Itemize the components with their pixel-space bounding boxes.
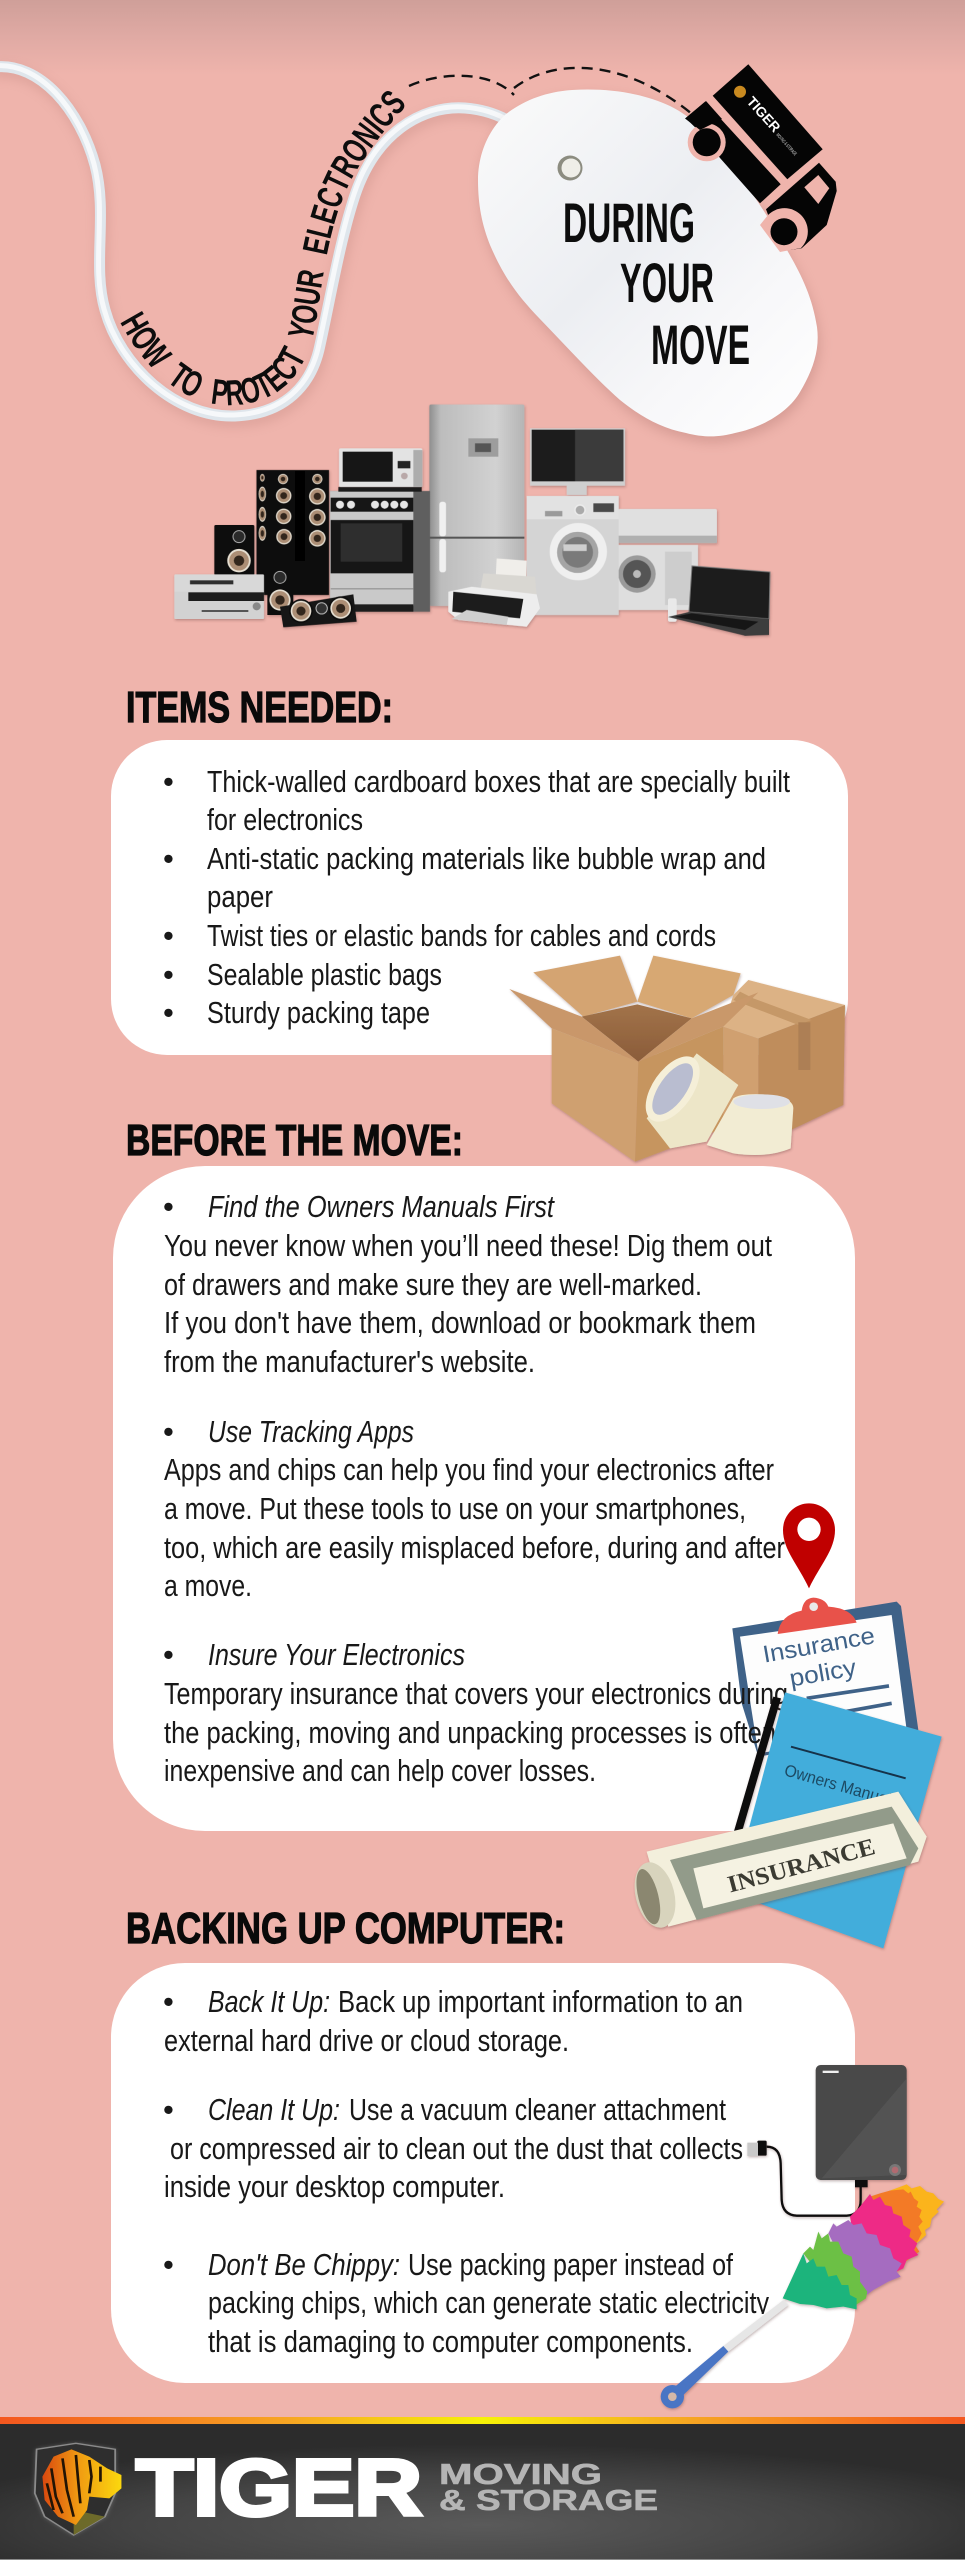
tip: owners manuals: • (163, 1189, 174, 1224)
tip: don't be chippy: Don't Be Chippy: (208, 2247, 400, 2282)
tip: insurance: the packing, moving and unpacking processes is often (164, 1715, 776, 1750)
heading: before the move: BEFORE THE MOVE: (126, 1116, 463, 1165)
items list: • (163, 764, 174, 799)
title: MOVE (651, 313, 750, 376)
text: before the move tips (163, 1189, 788, 1788)
tip: owners manuals: You never know when you’ll need these! Dig them out (164, 1228, 772, 1263)
tip: tracking apps: a move. Put these tools to use on your smartphones, (164, 1491, 746, 1526)
owners manual: Owners Manual (782, 1761, 893, 1809)
tip: back it up: • (163, 1984, 174, 2019)
tip: insurance: • (163, 1637, 174, 1672)
title (563, 191, 750, 376)
insurance certificate scroll (628, 1792, 927, 1932)
tip: back it up (163, 1984, 743, 2058)
tip: owners manuals (163, 1189, 772, 1379)
curved heading: HOW TO PROTECT YOUR ELECTRONICS (120, 91, 404, 406)
tip: back it up: Back up important information to an (338, 1984, 743, 2019)
open box (509, 956, 758, 1162)
footer (0, 2417, 965, 2560)
tip: insurance: Insure Your Electronics (208, 1637, 465, 1672)
tip: clean it up: • (163, 2092, 174, 2127)
icon: moving truck: TIGER (744, 93, 784, 135)
tip: don't be chippy: • (163, 2247, 174, 2282)
tip: don't be chippy: that is damaging to computer components. (208, 2324, 693, 2359)
tip: don't be chippy: packing chips, which can generate static electricity (208, 2285, 769, 2320)
items list: • (163, 841, 174, 876)
tip: tracking apps: Apps and chips can help you find your electronics after (164, 1452, 774, 1487)
items list: Twist ties or elastic bands for cables and cords (207, 918, 716, 953)
tip: tracking apps: • (163, 1414, 174, 1449)
tip: don't be chippy (163, 2247, 775, 2359)
clipboard: insurance policy: Insurance (761, 1622, 877, 1669)
items list: Sturdy packing tape (207, 995, 430, 1030)
bookshelf speaker (214, 525, 254, 575)
moving and storage wordmark (439, 2459, 658, 2517)
illustration: home electronics (174, 404, 770, 636)
tip: back it up: external hard drive or cloud storage. (164, 2023, 569, 2058)
panel: before the move (113, 1166, 855, 1831)
heading: backing up computer: BACKING UP COMPUTER: (126, 1904, 565, 1953)
tip: insurance (163, 1637, 788, 1788)
tip: insurance: inexpensive and can help cover losses. (164, 1753, 596, 1788)
illustration: cardboard boxes and tape (509, 956, 845, 1162)
heading: items needed: ITEMS NEEDED: (126, 683, 393, 732)
tip: insurance: Temporary insurance that covers your electronics during (164, 1676, 788, 1711)
external hard drive (747, 2065, 907, 2216)
tip: clean it up: Clean It Up: (208, 2092, 340, 2127)
tiger logo shield (35, 2443, 121, 2535)
tip: tracking apps: Use Tracking Apps (208, 1414, 414, 1449)
tip: tracking apps (163, 1414, 785, 1603)
items list: Sealable plastic bags (207, 957, 442, 992)
tip: don't be chippy: Use packing paper instead of (408, 2247, 733, 2282)
tip: owners manuals: from the manufacturer's website. (164, 1344, 535, 1379)
tower speakers (257, 470, 329, 595)
stove (330, 491, 430, 612)
icon: moving truck (685, 64, 837, 252)
clipboard: insurance policy: policy (787, 1654, 858, 1693)
icon: moving truck: MOVING & STORAGE (775, 132, 798, 157)
tip: clean it up: Use a vacuum cleaner attachment (349, 2092, 726, 2127)
items list: paper (207, 879, 273, 914)
items list: Anti-static packing materials like bubble wrap and (207, 841, 766, 876)
items list (163, 764, 790, 1030)
illustration: pin, owners manual, certificate (628, 1503, 942, 1948)
tip: clean it up: inside your desktop computer. (164, 2169, 505, 2204)
items list: • (163, 918, 174, 953)
tip: owners manuals: If you don't have them, download or bookmark them (164, 1305, 756, 1340)
laptop (668, 566, 770, 636)
ac indoor unit (618, 509, 717, 543)
tape rolls (635, 1047, 793, 1155)
moving and storage wordmark: MOVING (439, 2459, 602, 2491)
printer (448, 558, 540, 627)
tv (530, 428, 625, 495)
title: YOUR (620, 251, 714, 314)
owners manual (732, 1692, 942, 1948)
clipboard: insurance policy (732, 1598, 918, 1757)
moving and storage wordmark: & STORAGE (439, 2485, 658, 2517)
mouse cable (0, 66, 517, 421)
dashed route line (409, 68, 692, 114)
refrigerator (429, 404, 524, 606)
items list: • (163, 995, 174, 1030)
tip: tracking apps: too, which are easily misplaced before, during and after (164, 1530, 785, 1565)
ac outdoor unit (617, 545, 698, 610)
center speaker (280, 594, 357, 627)
tip: clean it up: or compressed air to clean out the dust that collects (170, 2131, 743, 2166)
panel: backing up computer (111, 1963, 855, 2383)
items list: • (163, 957, 174, 992)
panel: items needed (111, 740, 848, 1055)
feather duster (661, 2184, 944, 2408)
tip: tracking apps: a move. (164, 1568, 252, 1603)
small box (723, 980, 845, 1142)
tip: owners manuals: of drawers and make sure they are well-marked. (164, 1267, 702, 1302)
items list: for electronics (207, 802, 363, 837)
mouse (478, 90, 820, 442)
subwoofer (267, 567, 293, 615)
insurance certificate scroll: INSURANCE (725, 1834, 878, 1898)
title: DURING (563, 191, 695, 254)
icon: location pin (783, 1503, 835, 1588)
amplifiers (174, 574, 264, 619)
tiger wordmark: TIGER (136, 2443, 422, 2532)
tip: owners manuals: Find the Owners Manuals First (208, 1189, 555, 1224)
gradient stripe (0, 2417, 965, 2424)
washing machine (527, 496, 619, 615)
remote control (668, 598, 677, 622)
illustration: hard drive and feather duster (661, 2065, 944, 2408)
tip: clean it up (163, 2092, 743, 2204)
microwave (338, 448, 422, 492)
tip: back it up: Back It Up: (208, 1984, 330, 2019)
items list: Thick-walled cardboard boxes that are specially built (207, 764, 790, 799)
